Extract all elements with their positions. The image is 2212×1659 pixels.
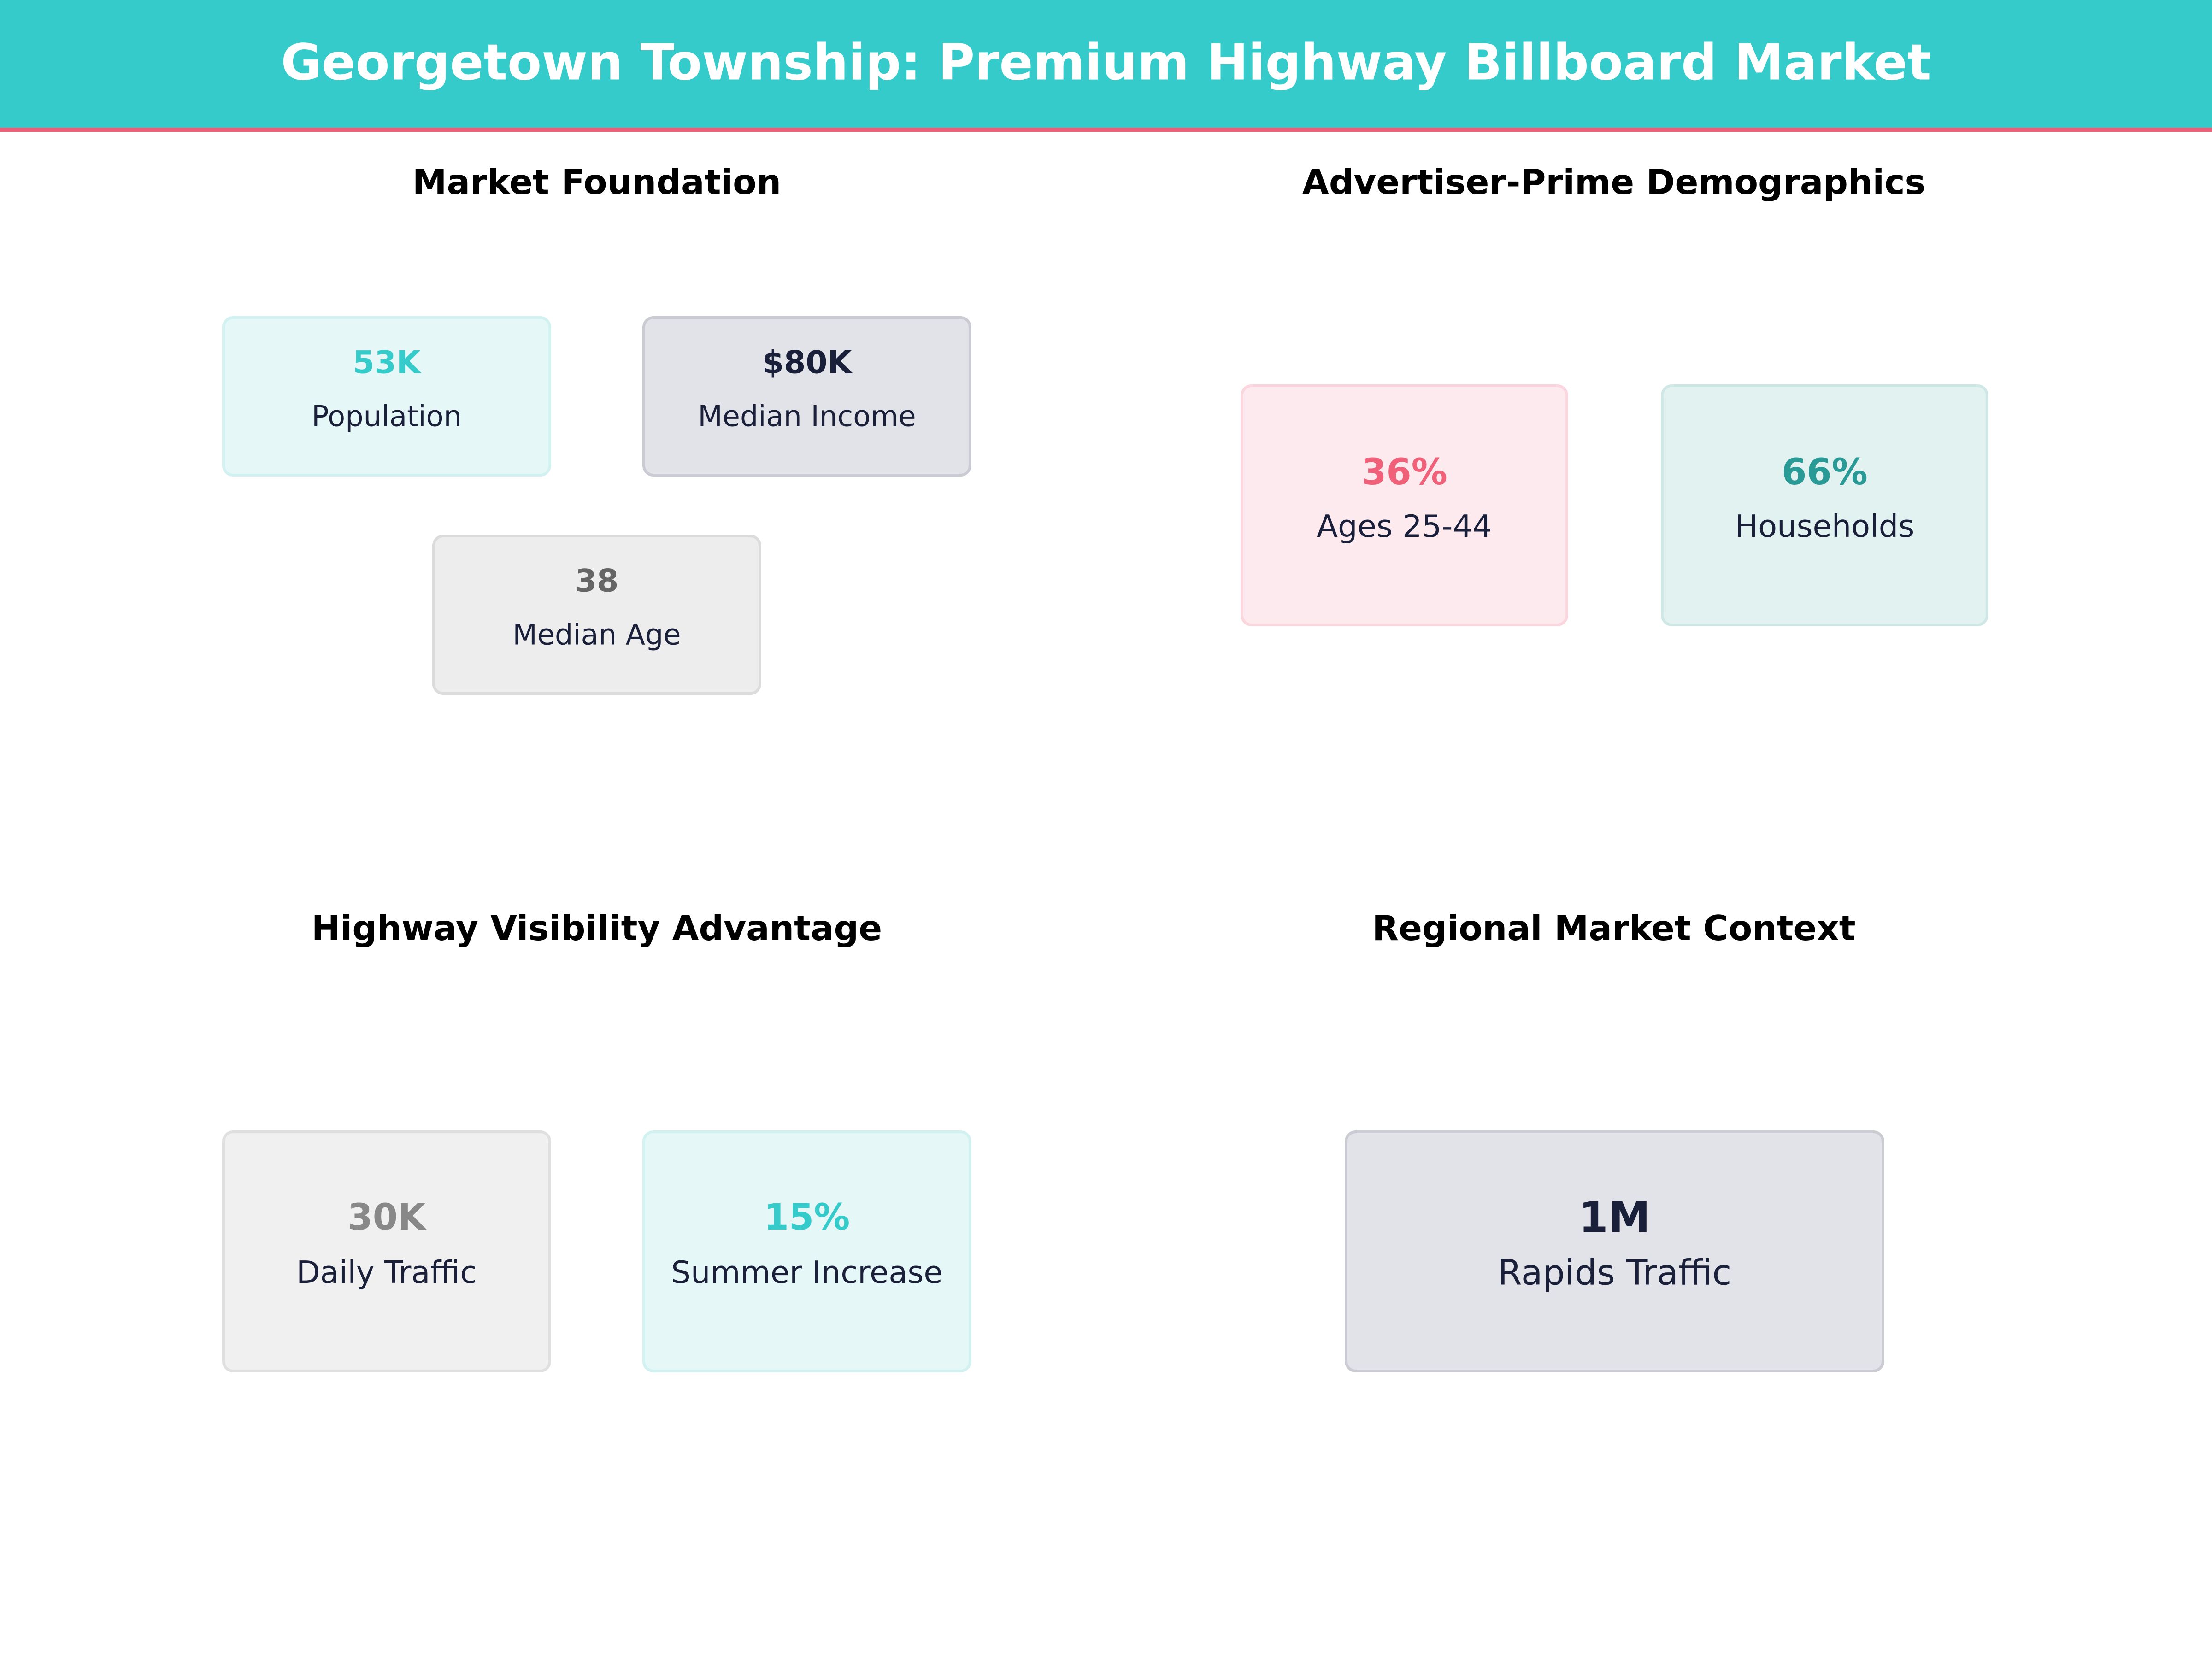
header banner [0,0,2212,132]
card: ages 25-44: Ages 25-44 [1317,508,1492,544]
card: median income: $80K [762,345,852,381]
card: daily traffic: 30K [347,1197,426,1238]
card: daily traffic [222,1130,551,1372]
card: households [1661,384,1988,626]
heading: Advertiser-Prime Demographics: Advertiser-Prime Demographics [1302,162,1925,202]
card: median income [642,316,971,477]
card: summer increase: 15% [764,1197,850,1238]
heading: Highway Visibility Advantage: Highway Visibility Advantage [312,908,882,948]
title: Georgetown Township: Premium Highway Billboard Market [281,34,1931,91]
card: median age [432,535,761,695]
heading: Market Foundation: Market Foundation [412,162,781,202]
card: ages 25-44: 36% [1361,452,1447,493]
card: summer increase [642,1130,971,1372]
card: ages 25-44 [1241,384,1568,626]
card: median age: 38 [575,563,618,599]
card: population: 53K [353,345,421,381]
card: summer increase: Summer Increase [671,1254,943,1290]
heading: Regional Market Context: Regional Market Context [1372,908,1856,948]
card: households: 66% [1782,452,1868,493]
card: daily traffic: Daily Traffic [296,1254,477,1290]
card: rapids traffic: 1M [1579,1193,1650,1242]
card: households: Households [1735,508,1914,544]
card: median income: Median Income [698,399,916,433]
card: rapids traffic: Rapids Traffic [1498,1252,1731,1293]
card: rapids traffic [1345,1130,1884,1372]
card: population: Population [312,399,462,433]
card: population [222,316,551,477]
card: median age: Median Age [512,618,681,652]
